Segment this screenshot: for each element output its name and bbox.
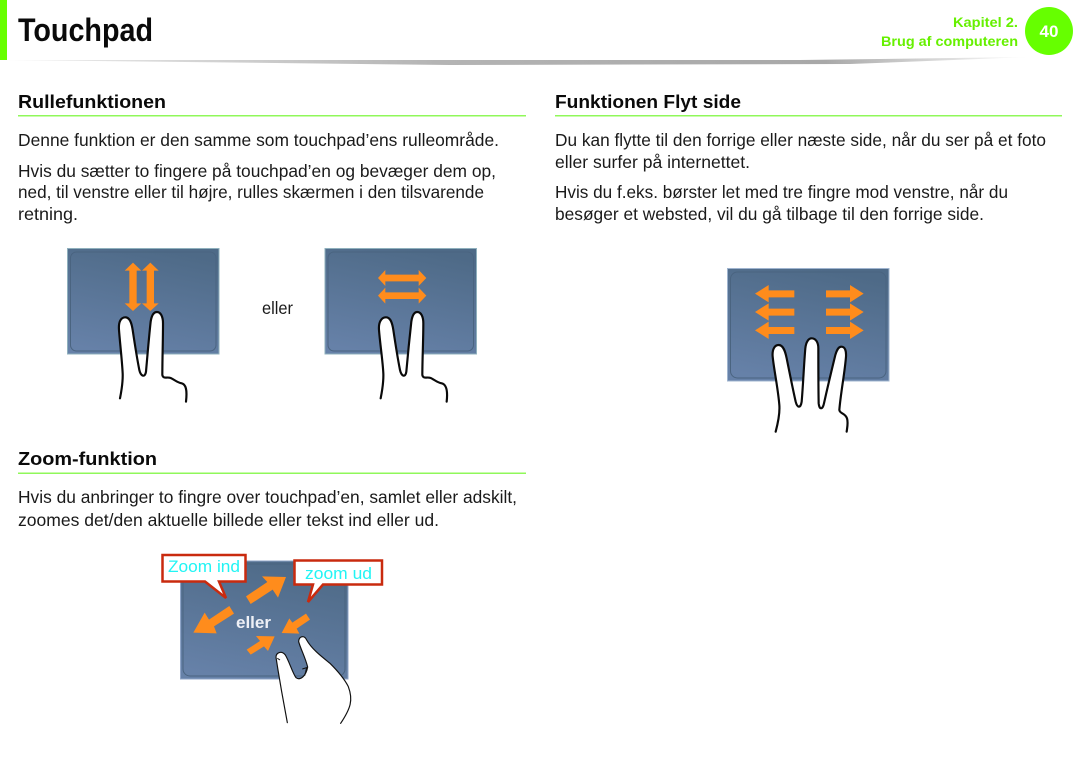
text block: scroll description: Hvis du sætter to fingere på touchpad’en og bevæger dem op, (18, 161, 496, 181)
label: eller: eller (262, 298, 293, 318)
text block: scroll description (18, 130, 499, 224)
icon: touchpad three-finger swipe (728, 268, 889, 432)
text block: zoom description: zoomes det/den aktuelle billede eller tekst ind eller ud. (18, 510, 439, 530)
callout: Zoom ind: Zoom ind (168, 557, 240, 576)
page number badge: 40 (1040, 22, 1058, 41)
chapter label: Kapitel 2. (953, 14, 1018, 30)
heading: Funktionen Flyt side: Funktionen Flyt side (555, 91, 741, 112)
title: Touchpad (18, 12, 153, 48)
heading: Rullefunktionen: Rullefunktionen (18, 91, 166, 112)
callout: zoom ud (294, 560, 382, 602)
icon: touchpad zoom gesture (180, 561, 351, 723)
header shadow (7, 57, 1030, 65)
text block: zoom description: Hvis du anbringer to fingre over touchpad’en, samlet eller adskilt, (18, 487, 517, 507)
text block: zoom description (18, 487, 517, 530)
text block: page flip description: Hvis du f.eks. børster let med tre fingre mod venstre, når du (555, 182, 1008, 202)
panel: Zoom-funktion (18, 448, 526, 723)
page number badge (1025, 7, 1073, 55)
chapter label: Brug af computeren (881, 33, 1018, 49)
header accent bar (0, 0, 7, 60)
chapter label (881, 14, 1018, 49)
label: eller on touchpad: eller (236, 614, 272, 632)
callout: zoom ud: zoom ud (305, 564, 372, 583)
text block: scroll description: Denne funktion er den samme som touchpad’ens rulleområde. (18, 130, 499, 150)
panel: Funktionen Flyt side (555, 91, 1062, 432)
panel: Rullefunktionen (18, 91, 526, 402)
text block: scroll description: retning. (18, 204, 78, 224)
heading: Zoom-funktion: Zoom-funktion (18, 448, 157, 469)
text block: page flip description (555, 130, 1046, 224)
text block: page flip description: besøger et websted, vil du gå tilbage til den forrige side. (555, 204, 984, 224)
text block: page flip description: Du kan flytte til den forrige eller næste side, når du ser på et foto (555, 130, 1046, 150)
icon: touchpad horizontal scroll (325, 248, 476, 402)
icon: touchpad vertical scroll (68, 248, 219, 402)
callout: Zoom ind (162, 555, 246, 598)
text block: page flip description: eller surfer på internettet. (555, 152, 750, 172)
text block: scroll description: ned, til venstre eller til højre, rulles skærmen i den tilsvarende (18, 182, 484, 202)
